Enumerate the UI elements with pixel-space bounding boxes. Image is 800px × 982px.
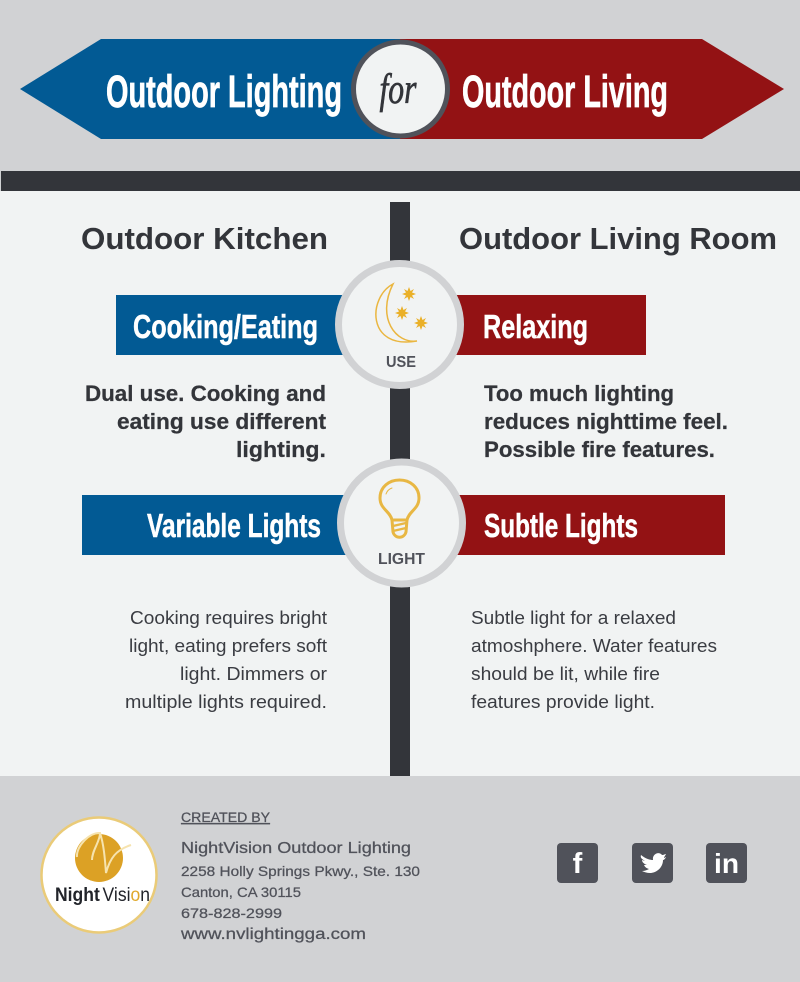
main panel xyxy=(0,191,800,776)
banner: subtle lights xyxy=(456,495,725,555)
text: kitchen use: eating use different xyxy=(117,409,326,434)
icon: stars xyxy=(395,287,428,330)
text: living room light: should be lit, while fire xyxy=(471,663,660,684)
title left: Outdoor Lighting xyxy=(106,66,342,117)
left blue arrow xyxy=(20,39,400,139)
text: living room use: reduces nighttime feel. xyxy=(484,409,728,434)
label: light: LIGHT xyxy=(378,551,425,568)
icon: facebook: f xyxy=(573,848,583,880)
label: use: USE xyxy=(386,354,416,371)
text: living room light: Subtle light for a relaxed xyxy=(471,607,676,628)
banner: relaxing: Relaxing xyxy=(483,308,588,345)
for badge: for xyxy=(380,67,417,113)
banner: subtle lights: Subtle Lights xyxy=(484,507,638,544)
logo wordmark: NightVision xyxy=(55,885,150,906)
banner: relaxing xyxy=(452,295,646,355)
dark divider bar xyxy=(1,171,800,191)
header banner xyxy=(20,39,784,139)
icon circle: use xyxy=(338,264,460,386)
icon circle: light xyxy=(340,462,462,584)
banner: cooking/eating: Cooking/Eating xyxy=(133,308,318,345)
address: 678-828-2999 xyxy=(181,905,282,921)
footer xyxy=(42,810,747,943)
logo xyxy=(42,818,156,932)
banner: variable lights: Variable Lights xyxy=(147,507,321,544)
text: kitchen use xyxy=(85,381,326,462)
address xyxy=(181,863,420,921)
text: living room use xyxy=(484,381,728,462)
company name: NightVision Outdoor Lighting xyxy=(181,840,411,857)
right red arrow xyxy=(400,39,784,139)
text: kitchen light xyxy=(125,607,327,712)
text: living room light xyxy=(471,607,717,712)
banner: cooking/eating xyxy=(116,295,348,355)
title right: Outdoor Living xyxy=(462,66,668,117)
central vertical line xyxy=(390,202,410,776)
text: kitchen use: lighting. xyxy=(236,437,326,462)
icon: facebook xyxy=(557,843,598,883)
created by: CREATED BY xyxy=(181,810,270,825)
text: kitchen use: Dual use. Cooking and xyxy=(85,381,326,406)
icon: linkedin: in xyxy=(714,848,739,879)
icon: light bulb xyxy=(380,480,419,537)
text: kitchen light: light, eating prefers soft xyxy=(129,635,327,656)
text: living room light: features provide light. xyxy=(471,691,655,712)
for badge xyxy=(354,42,448,136)
address: 2258 Holly Springs Pkwy., Ste. 130 xyxy=(181,863,420,879)
icon: moon xyxy=(376,284,417,342)
text: kitchen light: multiple lights required. xyxy=(125,691,327,712)
text: kitchen light: light. Dimmers or xyxy=(180,663,327,684)
text: living room use: Too much lighting xyxy=(484,381,674,406)
icon: linkedin xyxy=(706,843,747,883)
website: www.nvlightingga.com xyxy=(180,926,366,943)
logo sun xyxy=(75,834,123,882)
icon: twitter xyxy=(632,843,673,883)
text: living room use: Possible fire features. xyxy=(484,437,715,462)
heading: outdoor kitchen: Outdoor Kitchen xyxy=(81,221,328,256)
banner: variable lights xyxy=(82,495,348,555)
logo monogram xyxy=(77,833,131,873)
text: kitchen light: Cooking requires bright xyxy=(130,607,327,628)
heading: outdoor living room: Outdoor Living Room xyxy=(459,221,777,256)
address: Canton, CA 30115 xyxy=(181,884,301,900)
text: living room light: atmoshphere. Water features xyxy=(471,635,717,656)
